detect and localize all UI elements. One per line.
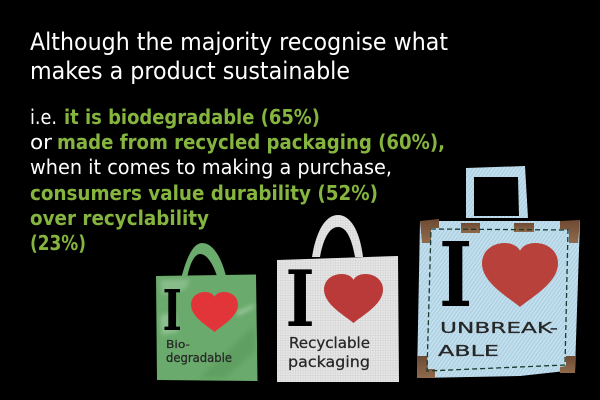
heading: Although the majority recognise what (30, 28, 448, 56)
bag label: ABLE (438, 342, 499, 360)
body text: (23%) (30, 231, 86, 255)
letter I: I (162, 278, 182, 344)
heading (30, 28, 448, 85)
body text: consumers value durability (52%) (30, 181, 378, 205)
bag label (166, 338, 232, 365)
heading: makes a product sustainable (30, 57, 350, 85)
heart (482, 243, 558, 307)
bag: recyclable packaging (277, 215, 399, 382)
body text: it is biodegradable (65%) (64, 105, 320, 129)
leather corners (417, 219, 580, 378)
bag label: packaging (288, 353, 370, 371)
stitching (427, 229, 568, 371)
bag label: UNBREAK- (440, 319, 558, 337)
bag label: degradable (166, 351, 232, 365)
bag label: Bio- (166, 338, 190, 351)
bag handle (466, 166, 528, 218)
bag body (277, 256, 399, 382)
body text: made from recycled packaging (60%), (57, 130, 445, 154)
body text: i.e. (30, 105, 57, 129)
body text (30, 105, 445, 255)
bag: unbreakable (417, 166, 580, 378)
bag label: Recyclable (289, 334, 370, 352)
bag: biodegradable (156, 243, 258, 381)
body text: or (30, 130, 53, 154)
bag handle (180, 243, 226, 283)
letter I: I (439, 223, 472, 328)
heart (324, 274, 383, 323)
heart (191, 292, 238, 332)
bag handle (312, 215, 363, 257)
bag label (288, 334, 370, 371)
body text: over recyclability (30, 206, 209, 230)
bag body (417, 221, 580, 378)
plastic highlights (160, 279, 256, 378)
bag label (438, 319, 558, 360)
letter I: I (286, 253, 315, 345)
body text: when it comes to making a purchase, (30, 155, 392, 179)
bag body (156, 274, 258, 381)
